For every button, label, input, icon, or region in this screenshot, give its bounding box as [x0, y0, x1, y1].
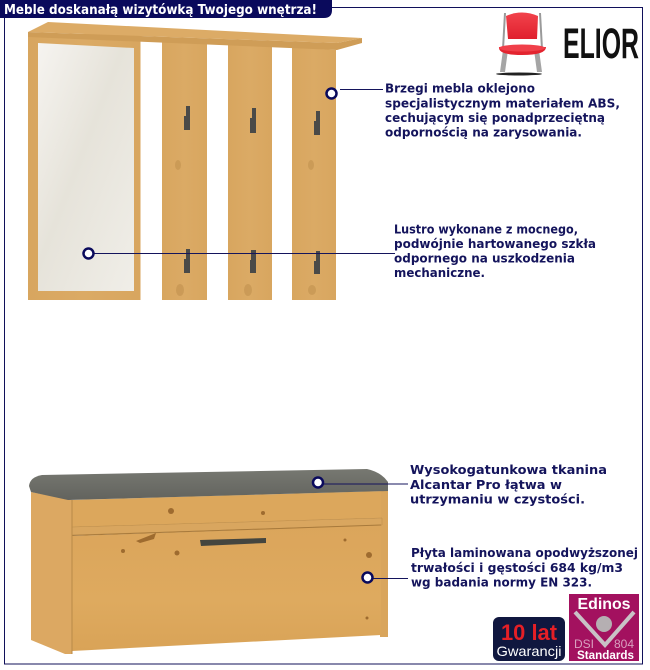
- bottom hooks: [184, 249, 320, 274]
- callout: mirror: [84, 248, 395, 258]
- bench top rail: [72, 491, 381, 527]
- callout: ABS edges: [326, 88, 383, 98]
- text: mirror: mechaniczne.: [394, 265, 485, 280]
- text: fabric: Wysokogatunkowa tkanina: [410, 462, 607, 477]
- bench door top shadow: [72, 525, 381, 536]
- bench knots: [121, 508, 372, 620]
- callout: board: [362, 572, 408, 582]
- bench door: [72, 525, 381, 651]
- text: mirror: podwójnie hartowanego szkła: [394, 236, 596, 251]
- text: mirror: Lustro wykonane z mocnego,: [394, 222, 578, 236]
- icon: red chair: [496, 12, 546, 76]
- text: mirror: odpornego na uszkodzenia: [394, 250, 575, 266]
- wall panel with mirror and hooks: [28, 22, 362, 300]
- badge title: 10 lat: [501, 620, 558, 645]
- coat panel 1: [162, 40, 207, 300]
- text: board: trwałości i gęstości 684 kg/m3: [411, 560, 623, 575]
- text: fabric: utrzymaniu w czystości.: [410, 492, 585, 506]
- text: board: wg badania normy EN 323.: [411, 574, 592, 590]
- coat panel 3: [292, 47, 336, 300]
- text: ABS edges: Brzegi mebla oklejono: [385, 80, 535, 96]
- DSI label: DSI: [574, 637, 594, 651]
- bench handle: [200, 538, 266, 546]
- wood knots: [175, 160, 316, 296]
- text: ABS edges: [385, 80, 620, 140]
- bench rail groove: [72, 518, 382, 535]
- badge subtitle: Gwarancji: [496, 643, 562, 659]
- badge: Edinos standards: [569, 594, 639, 662]
- text: fabric: [410, 462, 607, 506]
- coat panel 2: [228, 44, 272, 300]
- bench side: [31, 492, 72, 654]
- bench: [29, 469, 388, 654]
- brand name: Edinos: [578, 596, 631, 613]
- bench right edge: [380, 490, 388, 637]
- badge: 10 year warranty: [493, 617, 565, 661]
- shelf: [28, 22, 362, 50]
- text: ABS edges: cechującym się ponadprzeciętną: [385, 110, 605, 125]
- text: board: Płyta laminowana opodwyższonej: [411, 545, 638, 560]
- text: fabric: Alcantar Pro łątwa w: [410, 477, 562, 492]
- bench corner shadow: [71, 500, 73, 654]
- header text: Meble doskanałą wizytówką Twojego wnętrza!: [4, 3, 317, 18]
- top hooks: [184, 106, 320, 135]
- 804 label: 804: [614, 637, 634, 651]
- callout: fabric: [313, 478, 408, 488]
- text: mirror: [394, 222, 596, 280]
- text: ABS edges: specjalistycznym materiałem ABS,: [385, 96, 620, 110]
- bench seat: [29, 469, 388, 500]
- text: board: [411, 545, 638, 590]
- header banner: [0, 0, 332, 18]
- text: ABS edges: odpornością na zarysowania.: [385, 124, 582, 140]
- standards label: Standards: [577, 648, 634, 662]
- mirror panel: [28, 34, 140, 300]
